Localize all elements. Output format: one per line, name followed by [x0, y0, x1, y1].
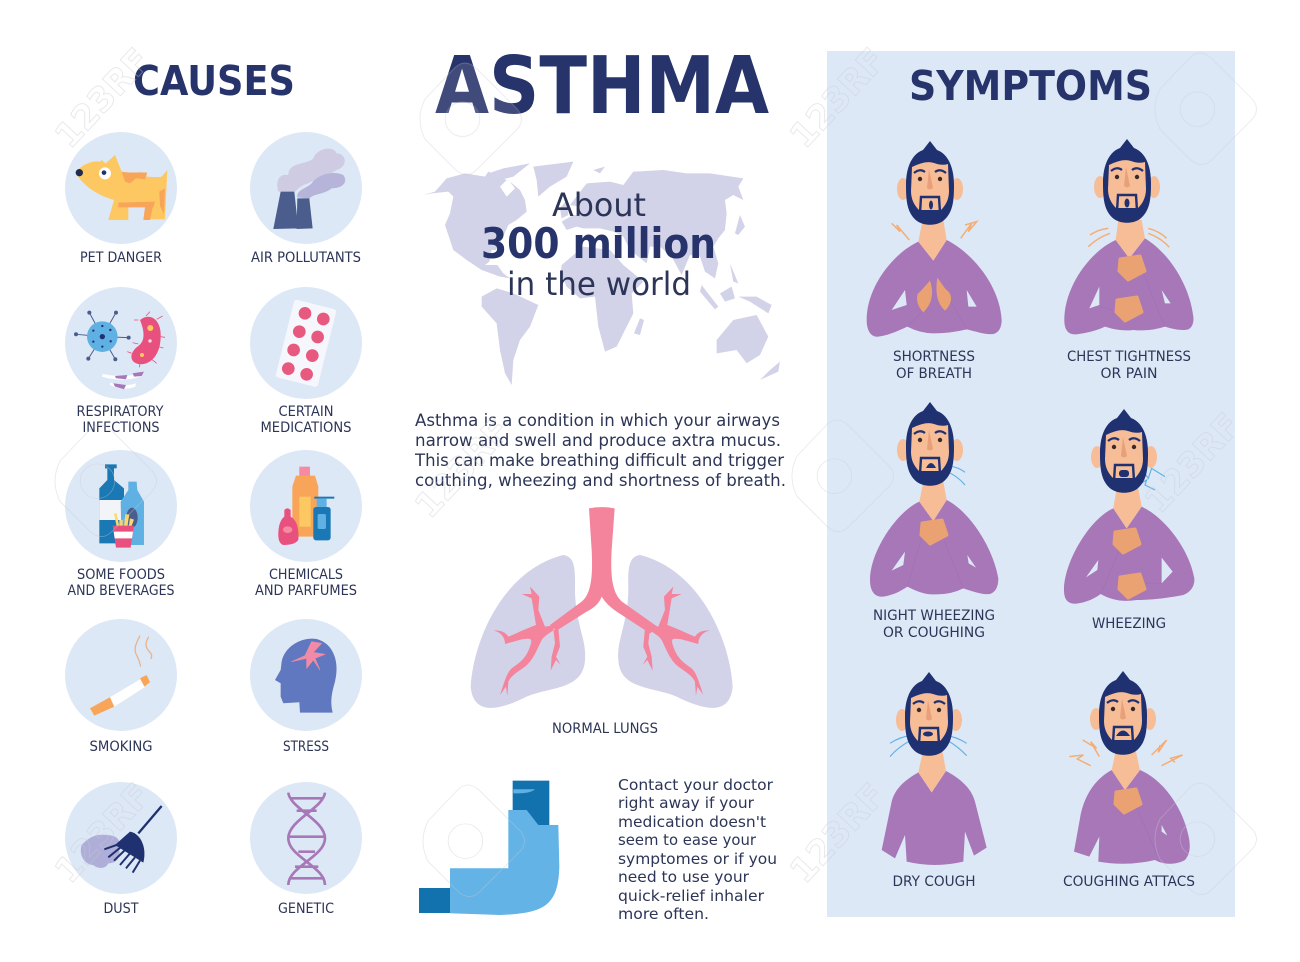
text: about 300 million in the world: About	[552, 186, 646, 224]
text: contact your doctor: seem to ease your	[618, 831, 757, 849]
symptom: dry cough	[882, 672, 987, 890]
lungs illustration	[471, 507, 733, 708]
cause: certain medications: MEDICATIONS	[260, 420, 352, 436]
text: asthma description: Asthma is a condition in which your airways	[415, 411, 780, 431]
symptom: shortness of breath: SHORTNESS	[893, 349, 975, 365]
symptom: coughing attacs	[1063, 671, 1195, 890]
symptom: chest tightness or pain	[1064, 139, 1193, 382]
symptom: wheezing	[1064, 409, 1194, 632]
cause: certain medications: CERTAIN	[278, 404, 334, 420]
cause: stress: STRESS	[283, 739, 329, 755]
cause: chemicals and parfumes: AND PARFUMES	[255, 583, 357, 599]
symptom: night wheezing or coughing: NIGHT WHEEZING	[873, 608, 995, 624]
cause: certain medications	[250, 287, 362, 436]
text: contact your doctor: quick-relief inhaler	[618, 887, 765, 905]
cause: genetic	[250, 782, 362, 917]
symptom: coughing attacs: COUGHING ATTACS	[1063, 874, 1195, 890]
cause: pet danger	[65, 132, 177, 266]
symptom: night wheezing or coughing: OR COUGHING	[883, 625, 985, 641]
panel: symptoms background	[827, 51, 1235, 917]
cause: air pollutants	[250, 132, 362, 266]
text: contact your doctor: need to use your	[618, 868, 750, 886]
symptom: night wheezing or coughing	[870, 402, 998, 641]
symptom: chest tightness or pain: OR PAIN	[1100, 366, 1158, 382]
text: asthma description	[414, 411, 786, 491]
cause: respiratory infections: INFECTIONS	[82, 420, 160, 436]
cause: pet danger: PET DANGER	[80, 250, 162, 266]
watermark overlay: 123RF	[782, 776, 894, 891]
watermark overlay: 123RF	[1137, 406, 1249, 521]
cause: chemicals and parfumes	[250, 450, 362, 599]
heading: symptoms: SYMPTOMS	[909, 62, 1152, 110]
watermark overlay: 123RF	[782, 41, 894, 156]
cause: air pollutants: AIR POLLUTANTS	[251, 250, 361, 266]
text: about 300 million in the world: 300 million	[481, 219, 716, 268]
symptom: chest tightness or pain: CHEST TIGHTNESS	[1067, 349, 1191, 365]
watermark overlay: 123RF	[407, 411, 519, 526]
text: asthma description: This can make breathing difficult and trigger	[414, 451, 784, 471]
symptom: shortness of breath	[867, 141, 1002, 382]
symptom: wheezing: WHEEZING	[1092, 616, 1166, 632]
panel: causes	[65, 132, 362, 917]
text: contact your doctor: symptomes or if you	[618, 850, 777, 868]
cause: some foods and beverages: AND BEVERAGES	[68, 583, 175, 599]
watermark overlay: 123RF	[47, 41, 159, 156]
text: about 300 million in the world: in the world	[507, 265, 691, 303]
label: normal lungs: NORMAL LUNGS	[552, 721, 658, 737]
cause: dust: DUST	[104, 901, 139, 917]
watermark overlay: 123RF	[47, 776, 159, 891]
cause: some foods and beverages	[65, 450, 177, 599]
world map	[423, 162, 780, 385]
cause: smoking	[65, 619, 177, 755]
cause: some foods and beverages: SOME FOODS	[77, 567, 165, 583]
cause: genetic: GENETIC	[278, 901, 334, 917]
text: contact your doctor: Contact your doctor	[618, 776, 774, 794]
cause: respiratory infections: RESPIRATORY	[76, 404, 164, 420]
title: ASTHMA	[435, 40, 769, 132]
text: about 300 million in the world	[481, 186, 716, 303]
text: contact your doctor: medication doesn't	[618, 813, 766, 831]
text: contact your doctor	[618, 776, 777, 923]
inhaler illustration	[419, 781, 559, 915]
text: asthma description: narrow and swell and produce axtra mucus.	[415, 431, 781, 451]
cause: dust	[65, 782, 177, 917]
cause: respiratory infections	[65, 287, 177, 436]
text: asthma description: couthing, wheezing and shortness of breath.	[415, 471, 786, 491]
symptom: shortness of breath: OF BREATH	[896, 366, 972, 382]
cause: stress	[250, 619, 362, 755]
cause: smoking: SMOKING	[90, 739, 152, 755]
heading: causes: CAUSES	[133, 57, 295, 105]
cause: chemicals and parfumes: CHEMICALS	[269, 567, 343, 583]
text: contact your doctor: right away if your	[618, 794, 755, 812]
text: contact your doctor: more often.	[618, 905, 709, 923]
symptom: dry cough: DRY COUGH	[892, 874, 976, 890]
